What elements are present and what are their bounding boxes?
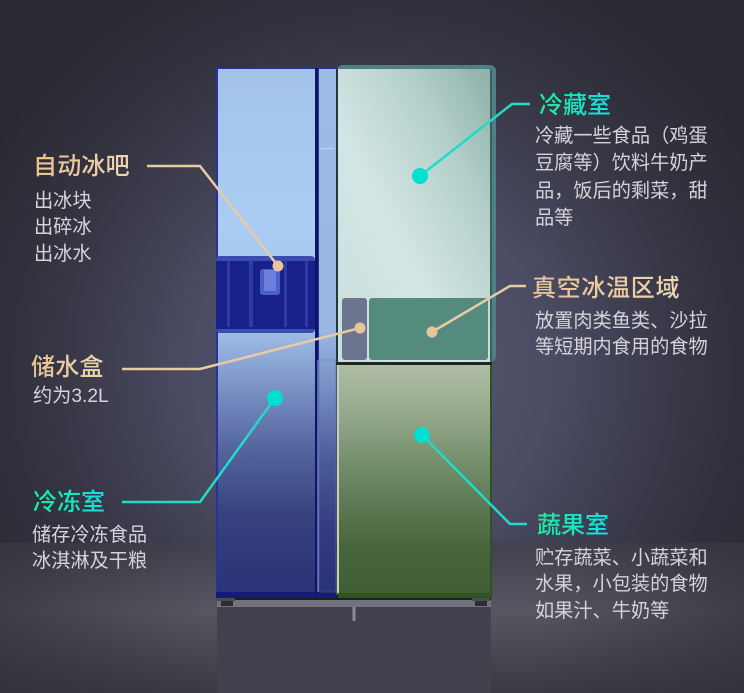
marker dot — [412, 168, 428, 184]
description: 等短期内食用的食物 — [535, 336, 708, 358]
callout: vegetable compartment — [414, 427, 708, 622]
panel: freezer door — [216, 68, 336, 598]
description: 约为3.2L — [33, 385, 109, 407]
marker dot — [414, 427, 430, 443]
heading: 储水盒 — [31, 354, 104, 381]
floor shadow — [217, 600, 491, 693]
callout: fridge — [412, 92, 708, 229]
leader line — [122, 398, 275, 502]
heading: 冷冻室 — [33, 489, 105, 516]
description — [535, 310, 708, 358]
panel: ice dispenser — [216, 256, 315, 333]
marker dot — [426, 326, 438, 338]
panel: vegetable compartment — [336, 362, 492, 598]
callout: ice dispenser — [33, 153, 284, 272]
description: 如果汁、牛奶等 — [535, 600, 669, 622]
description: 冰淇淋及干粮 — [32, 550, 147, 572]
heading: 冷藏室 — [539, 92, 611, 119]
panel: vacuum zone — [369, 298, 488, 360]
panel: storage box — [342, 298, 367, 360]
leader line — [432, 286, 526, 332]
description: 储存冷冻食品 — [32, 524, 147, 546]
panel: flip mullion — [319, 69, 336, 593]
leader line — [147, 166, 278, 266]
description: 出冰块 — [34, 190, 92, 212]
description — [34, 190, 92, 265]
leader line — [122, 328, 360, 369]
heading: 蔬果室 — [537, 512, 609, 539]
panel: fridge compartment — [336, 65, 496, 362]
description: 出冰水 — [34, 243, 92, 265]
description: 品等 — [535, 207, 573, 229]
callout: vacuum zone — [426, 275, 708, 358]
marker dot — [272, 260, 284, 272]
description — [32, 524, 147, 572]
leader line — [422, 435, 527, 524]
description — [535, 547, 708, 622]
leader line — [420, 104, 530, 176]
feet — [217, 595, 491, 606]
description: 水果，小包装的食物 — [535, 573, 708, 595]
marker dot — [267, 390, 283, 406]
description: 出碎冰 — [34, 216, 92, 238]
description: 冷藏一些食品（鸡蛋 — [535, 125, 708, 147]
description: 品，饭后的剩菜，甜 — [535, 180, 708, 202]
heading: 自动冰吧 — [33, 153, 130, 180]
description: 贮存蔬菜、小蔬菜和 — [535, 547, 708, 569]
heading: 真空冰温区域 — [532, 275, 680, 302]
callout: freezer — [32, 390, 283, 572]
description — [535, 125, 708, 229]
description: 豆腐等）饮料牛奶产 — [535, 152, 708, 174]
description: 放置肉类鱼类、沙拉 — [535, 310, 708, 332]
callout: water box — [31, 322, 366, 407]
refrigerator — [216, 65, 496, 693]
marker dot — [354, 322, 366, 334]
